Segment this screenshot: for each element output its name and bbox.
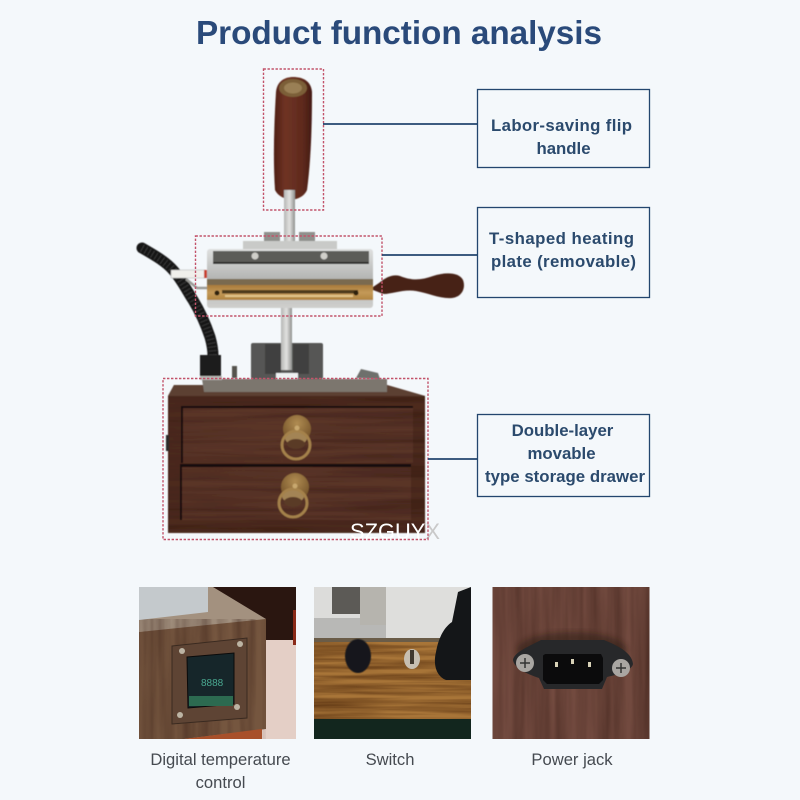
callout: double-layer drawer: Double-layer <box>512 421 614 440</box>
heating plate body <box>207 249 373 308</box>
photo: power jack <box>492 587 650 739</box>
callout: double-layer drawer <box>478 414 650 496</box>
caption: digital temperature control: control <box>196 773 245 792</box>
drawer pull: top <box>282 415 311 459</box>
side latch <box>166 435 169 451</box>
photo: switch <box>314 587 471 739</box>
drawer cabinet <box>168 385 425 533</box>
photo: digital temperature control <box>139 587 296 739</box>
dashed highlight: heating plate <box>196 236 382 316</box>
leader line: heating plate <box>382 254 477 256</box>
callout: double-layer drawer: movable <box>527 444 596 463</box>
product illustration: stamping machine <box>142 77 464 533</box>
callout: labor-saving flip handle: Labor-saving flip <box>491 116 632 135</box>
drawer pull: bottom <box>279 473 309 517</box>
cable connector <box>200 355 221 378</box>
handle <box>274 77 312 200</box>
leader line: drawer <box>428 458 477 460</box>
caption: digital temperature control <box>150 750 291 792</box>
caption: digital temperature control: Digital temperature <box>150 750 291 769</box>
callout: T-shaped heating plate: plate (removable) <box>491 252 636 271</box>
caption: power jack: Power jack <box>531 750 613 769</box>
caption: switch: Switch <box>366 750 414 769</box>
callout: labor-saving flip handle <box>478 90 650 168</box>
watermark: SZGUYX <box>350 519 440 544</box>
dashed highlight: handle <box>264 69 324 210</box>
hinge block <box>251 343 323 379</box>
photo: digital temperature control: 8888 <box>201 678 224 689</box>
callout: double-layer drawer: type storage drawer <box>485 467 645 486</box>
callout: T-shaped heating plate <box>478 208 650 298</box>
callout: T-shaped heating plate: T-shaped heating <box>489 229 634 248</box>
leader line: handle <box>323 123 477 125</box>
side handle <box>373 273 464 298</box>
brass type bar <box>207 285 373 300</box>
callout: labor-saving flip handle: handle <box>536 139 591 158</box>
dashed highlight: drawer <box>163 378 428 540</box>
lower stem <box>281 306 292 370</box>
drawer fronts <box>181 406 413 463</box>
white tube <box>171 270 205 278</box>
upper stem <box>284 190 295 242</box>
top blocks <box>264 232 280 243</box>
small post <box>232 366 237 378</box>
title: Product function analysis <box>196 15 602 52</box>
grey top plate <box>202 379 387 392</box>
cable <box>142 248 213 356</box>
